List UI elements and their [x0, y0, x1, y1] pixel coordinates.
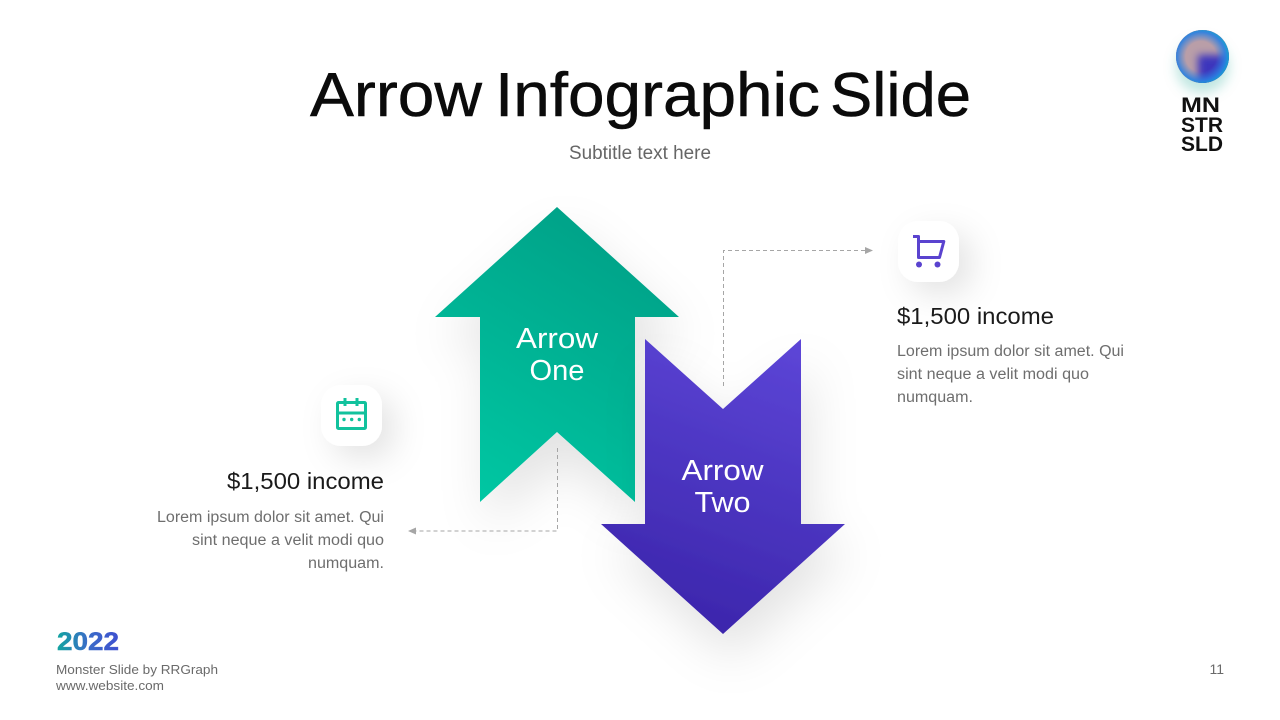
text block: left income: Lorem ipsum dolor sit amet. Qui	[157, 509, 384, 526]
arrow two label: Arrow	[682, 455, 765, 487]
year: 2022	[57, 628, 119, 656]
arrow two label	[682, 455, 765, 519]
logo: wordmark: SLD	[1181, 132, 1223, 156]
text block: left income: sint neque a velit modi quo	[192, 532, 384, 549]
text block: left income: numquam.	[308, 555, 384, 572]
arrow one label: One	[530, 355, 584, 387]
logo	[1170, 24, 1235, 156]
footer credits: www.website.com	[55, 678, 164, 693]
text block: left income: $1,500 income	[227, 468, 384, 494]
connector arrow: left	[408, 448, 558, 534]
text block: right income	[897, 303, 1124, 406]
arrow one label	[516, 323, 599, 387]
text block: right income: $1,500 income	[897, 303, 1054, 329]
logo: wordmark: MN	[1181, 93, 1220, 117]
text block: right income: sint neque a velit modi quo	[897, 366, 1089, 383]
text block: right income: Lorem ipsum dolor sit amet. Qui	[897, 343, 1124, 360]
icon card: calendar	[321, 385, 382, 446]
title	[310, 61, 971, 130]
icon: cart	[913, 236, 944, 268]
icon: calendar	[337, 398, 366, 428]
text block: right income: numquam.	[897, 389, 973, 406]
logo: wordmark	[1181, 93, 1223, 156]
arrow two label: Two	[694, 487, 750, 519]
page number: 11	[1209, 661, 1224, 677]
subtitle: Subtitle text here	[569, 143, 711, 164]
arrow one label: Arrow	[516, 323, 599, 355]
icon card: cart	[898, 221, 959, 282]
connector arrow: right	[724, 247, 873, 386]
title: Arrow	[310, 61, 482, 130]
logo: sphere	[1170, 24, 1235, 90]
footer credits: Monster Slide by RRGraph	[56, 662, 218, 677]
logo: wordmark: STR	[1181, 113, 1223, 137]
title: Slide	[830, 61, 971, 130]
arrow two: down	[601, 339, 845, 634]
arrow one: up	[435, 207, 679, 502]
title: Infographic	[495, 61, 820, 130]
footer credits	[55, 662, 218, 693]
text block: left income	[157, 468, 384, 572]
